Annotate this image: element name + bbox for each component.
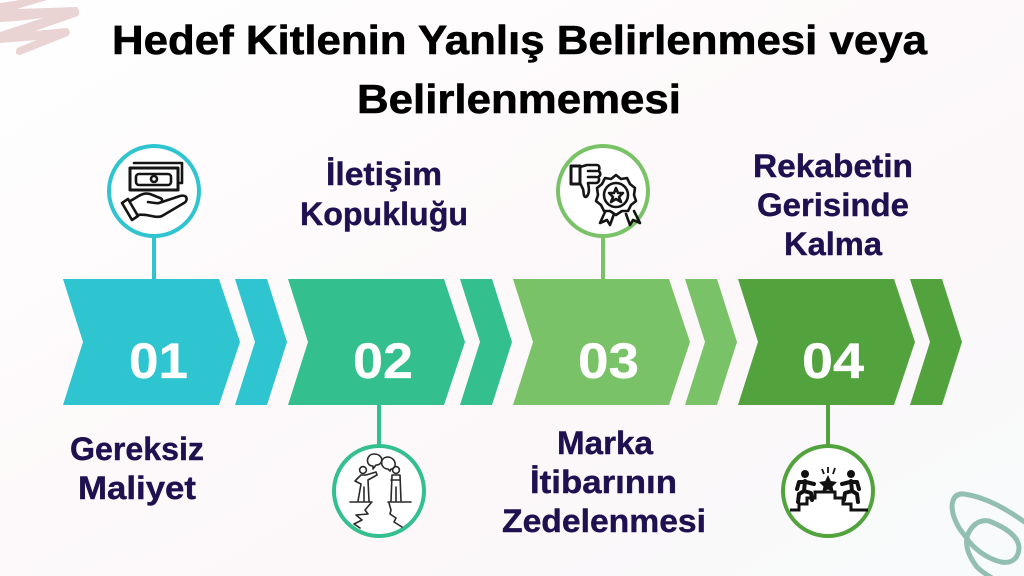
label: Marka İtibarının Zedelenmesi: Marka: [557, 425, 653, 461]
number 02: 02: [353, 333, 413, 389]
label: Rekabetin Gerisinde Kalma: Kalma: [784, 226, 882, 262]
label: Gereksiz Maliyet: [70, 431, 204, 506]
title: [112, 17, 928, 122]
icon: two people over a gap: [334, 446, 424, 536]
label: Rekabetin Gerisinde Kalma: [753, 148, 913, 262]
title: Belirlenmemesi: [357, 76, 681, 122]
number 04: 04: [802, 333, 864, 389]
label: Gereksiz Maliyet: Gereksiz: [70, 431, 204, 467]
step 01: Gereksiz Maliyet: [63, 146, 287, 506]
chevron 01: [63, 279, 287, 405]
label: İletişim Kopukluğu: İletişim: [326, 156, 442, 192]
label: Rekabetin Gerisinde Kalma: Gerisinde: [757, 187, 909, 223]
number 01: 01: [129, 333, 188, 389]
icon: two figures climbing to a star: [783, 446, 873, 536]
connector 02: [377, 405, 381, 447]
step 04: Rekabetin Gerisinde Kalma: [738, 148, 962, 536]
step 03: Marka İtibarının Zedelenmesi: [502, 146, 737, 539]
label: Rekabetin Gerisinde Kalma: Rekabetin: [753, 148, 913, 184]
connector 01: [152, 236, 156, 280]
label: Gereksiz Maliyet: Maliyet: [78, 470, 196, 506]
label: Marka İtibarının Zedelenmesi: [502, 425, 706, 539]
decoration: teal loops: [952, 494, 1024, 576]
number 03: 03: [578, 333, 639, 389]
connector 03: [601, 236, 605, 280]
label: Marka İtibarının Zedelenmesi: Zedelenmesi: [502, 503, 706, 539]
label: İletişim Kopukluğu: Kopukluğu: [300, 196, 468, 232]
icon: thumbs down and rosette: [558, 146, 648, 236]
label: Marka İtibarının Zedelenmesi: İtibarının: [530, 464, 677, 500]
title: Hedef Kitlenin Yanlış Belirlenmesi veya: [112, 17, 928, 63]
connector 04: [826, 405, 830, 447]
chevron 02: [288, 279, 512, 405]
chevron 04: [738, 279, 962, 405]
decoration: pink brush scribble: [0, 0, 79, 55]
step 02: İletişim Kopukluğu: [288, 156, 512, 536]
label: İletişim Kopukluğu: [300, 156, 468, 232]
chevron 03: [513, 279, 737, 405]
icon: money on open hand: [109, 146, 199, 236]
